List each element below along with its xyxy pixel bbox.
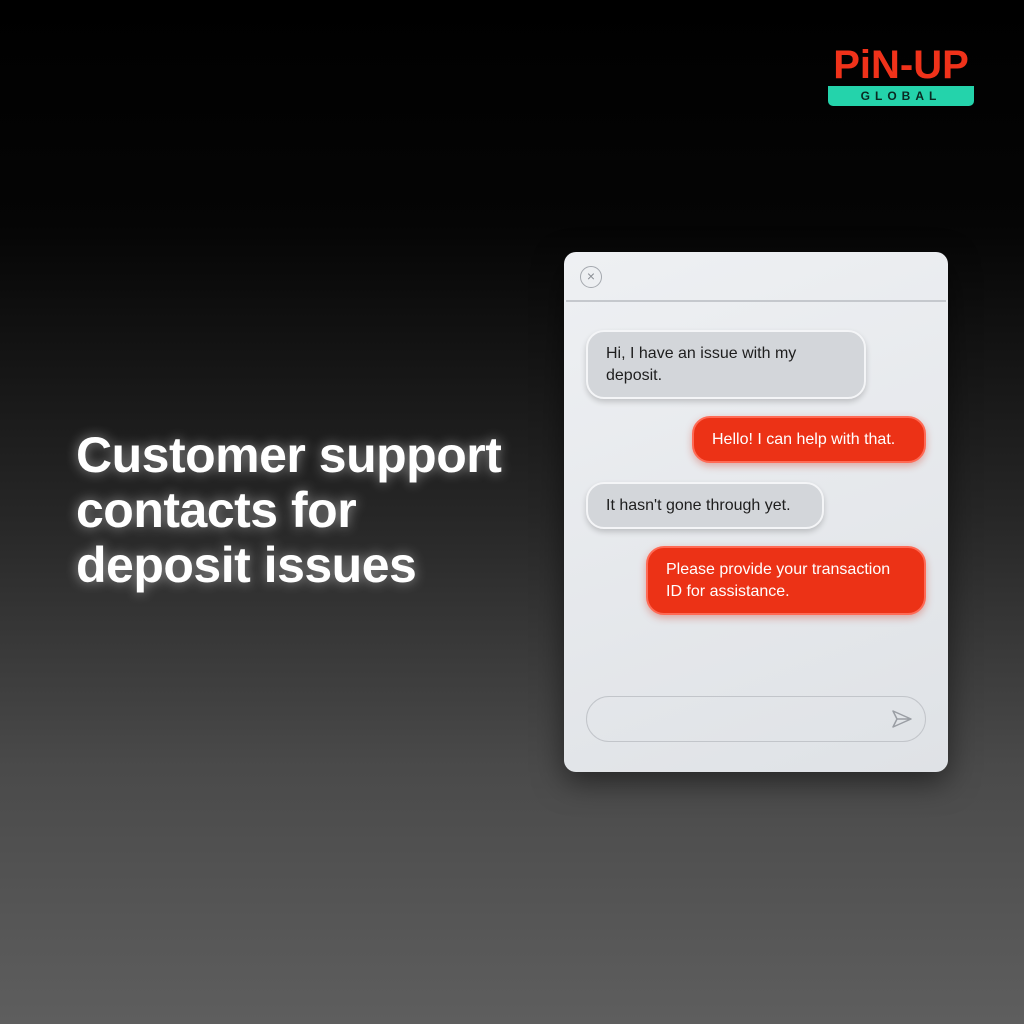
logo xyxy=(828,43,974,106)
logo: GLOBAL xyxy=(861,89,941,103)
bubble: user 1: Hi, I have an issue with my deposit. xyxy=(606,344,796,384)
input bar xyxy=(586,696,926,742)
icon: close: × xyxy=(587,268,595,284)
logo: PiN-UP xyxy=(833,43,969,87)
icon: close xyxy=(580,266,602,288)
bubble: user 1 xyxy=(586,330,866,399)
bubble: agent 1 xyxy=(692,416,926,463)
chat window xyxy=(564,252,948,772)
icon: send xyxy=(892,710,912,728)
title: Customer support contacts for deposit issues xyxy=(76,427,501,593)
bubble: user 2: It hasn't gone through yet. xyxy=(606,496,791,514)
bubble: agent 2: Please provide your transaction ID for assistance. xyxy=(666,560,890,600)
bubble: agent 2 xyxy=(646,546,926,615)
bubble: agent 1: Hello! I can help with that. xyxy=(712,430,895,448)
bubble: user 2 xyxy=(586,482,824,529)
